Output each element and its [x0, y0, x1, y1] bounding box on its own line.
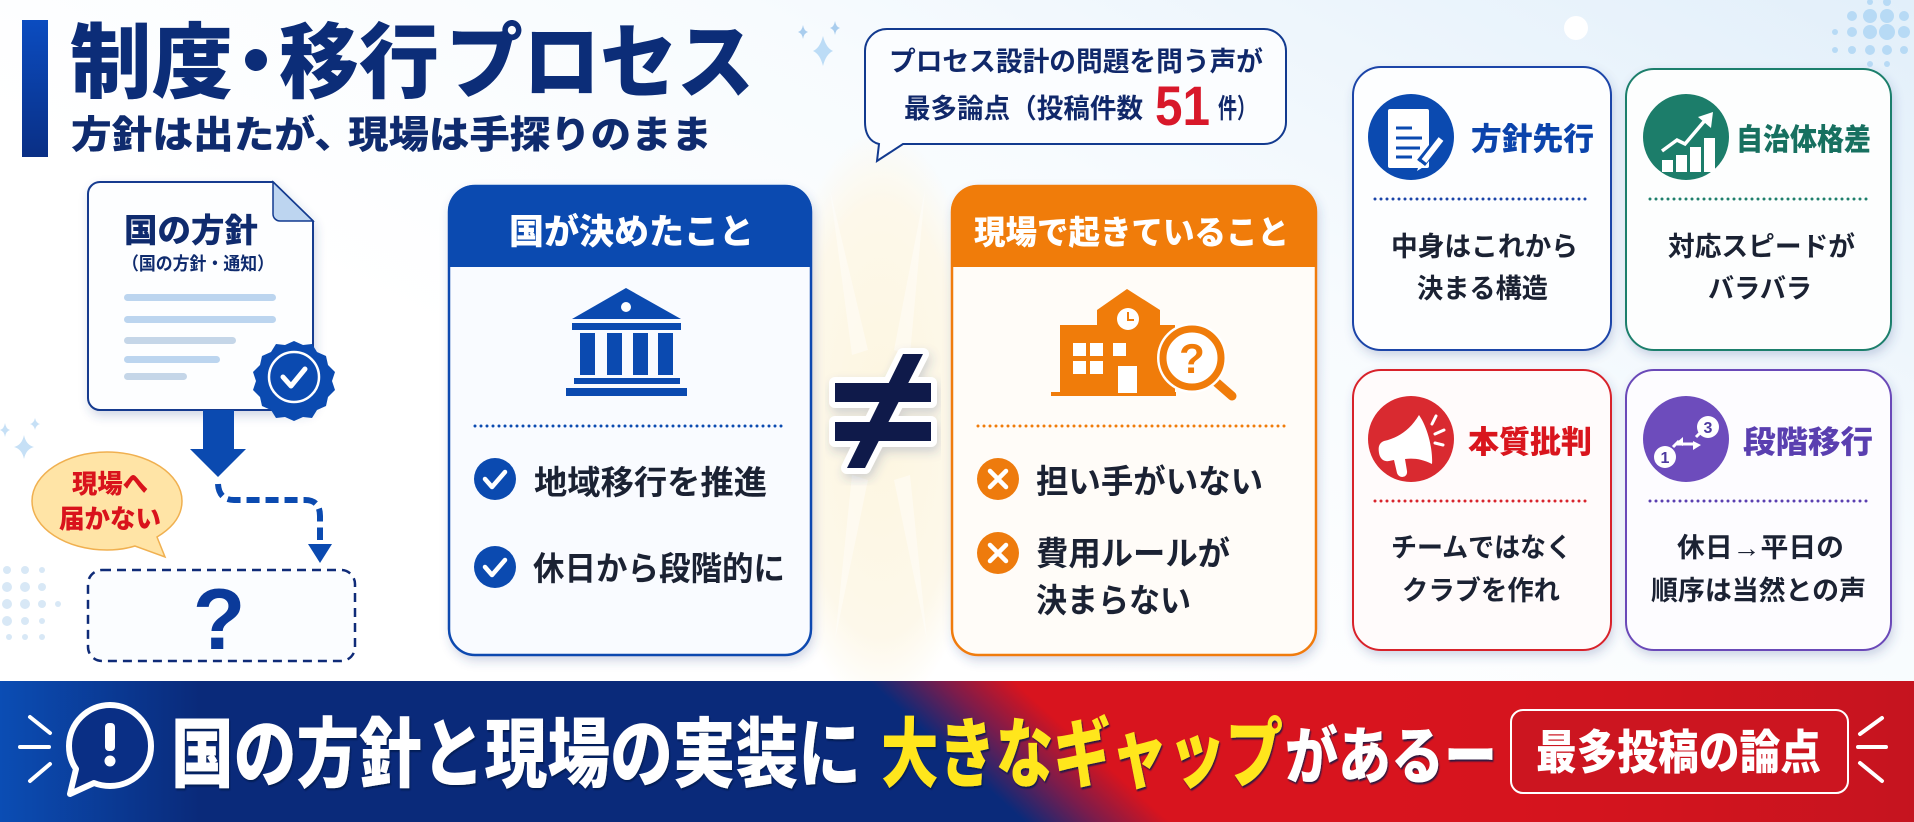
- card: essential criticism: チームではなく: [1391, 533, 1572, 563]
- card: municipal gaps: 自治体格差: [1736, 124, 1871, 157]
- subtitle: 方針は出たが、: [71, 114, 355, 157]
- item: promote regional transition: 地域移行を推進: [534, 464, 767, 501]
- heading: 国が決めたこと: [509, 212, 754, 252]
- unknown box: [88, 570, 355, 668]
- icon: approval seal: [253, 341, 335, 421]
- icon: steps one to three: 1: [1661, 450, 1670, 467]
- card: phased transition: 段階移行: [1743, 425, 1873, 460]
- item: no one to take on: 担い手がいない: [1036, 463, 1263, 500]
- item: cost rules undecided: 決まらない: [1036, 582, 1191, 619]
- icon: school with magnifier: ?: [1179, 335, 1205, 382]
- banner text: 国の方針と現場の実装に: [171, 713, 861, 798]
- icon: policy document: [88, 182, 313, 410]
- icon: rising chart: [1643, 94, 1729, 180]
- panel: policy document flow: [32, 182, 355, 668]
- banner: conclusion: があるー: [1285, 722, 1497, 792]
- icon: policy document: 国の方針: [124, 212, 258, 249]
- card: policy first: 決まる構造: [1417, 274, 1548, 304]
- icon: megaphone: [1368, 396, 1454, 482]
- card: policy first: 方針先行: [1471, 122, 1594, 157]
- number: 51: 51: [1155, 74, 1210, 137]
- panel: what the state decided: [448, 185, 812, 655]
- heading: 現場で起きていること: [974, 214, 1289, 251]
- callout: does not reach the field: 現場へ: [72, 469, 148, 499]
- decoration: sparkles and dots: [0, 0, 1910, 640]
- icon: steps one to three: 3: [1704, 420, 1713, 437]
- callout: does not reach the field: 届かない: [59, 504, 161, 534]
- card: policy first: 中身はこれから: [1391, 232, 1578, 262]
- icon: document and pen: [1368, 94, 1454, 180]
- arrow: down to field: [190, 410, 246, 477]
- subtitle: 現場は手探りのまま: [348, 115, 712, 157]
- card: municipal gaps: 対応スピードが: [1668, 231, 1855, 262]
- card: municipal gaps: [1626, 69, 1891, 350]
- glow behind not-equal sign: [771, 130, 991, 710]
- subtitle: [71, 114, 712, 157]
- icon: policy document: （国の方針・通知）: [122, 253, 274, 274]
- title: 制度: [70, 18, 233, 109]
- icon: steps one to three: [1643, 396, 1729, 482]
- item: stepwise from holidays: [474, 546, 785, 588]
- title: プロセス: [446, 18, 754, 109]
- card: phased transition: 休日→平日の: [1677, 533, 1844, 563]
- not equal sign: [835, 354, 931, 468]
- card: municipal gaps: バラバラ: [1708, 274, 1812, 304]
- icon: speech bubble with exclamation: [69, 705, 151, 794]
- callout: most discussed topic: プロセス設計の問題を問う声が: [889, 46, 1263, 77]
- icon: school with magnifier: [1051, 289, 1232, 396]
- badge: most posted topic: [1511, 710, 1848, 793]
- unknown box: ?: [193, 572, 245, 668]
- banner: conclusion: [0, 681, 1914, 822]
- title: [70, 18, 754, 109]
- card: essential criticism: [1353, 370, 1611, 650]
- title: 移行: [279, 18, 439, 109]
- item: stepwise from holidays: 休日から段階的に: [533, 550, 785, 587]
- item: cost rules undecided: 費用ルールが: [1036, 535, 1230, 572]
- callout: most discussed topic: [865, 29, 1286, 161]
- panel: what is happening in the field: [951, 185, 1317, 655]
- card: phased transition: 順序は当然との声: [1651, 576, 1866, 606]
- banner: conclusion: 大きなギャップ: [881, 713, 1283, 798]
- callout: most discussed topic: 件）: [1218, 94, 1256, 124]
- card: essential criticism: 本質批判: [1468, 425, 1592, 460]
- title block: [22, 18, 754, 157]
- callout: most discussed topic: 最多論点（投稿件数: [904, 94, 1143, 124]
- card: policy first: [1353, 67, 1611, 350]
- arrow: dashed path to unknown: [218, 484, 332, 563]
- item: promote regional transition: [474, 458, 767, 501]
- item: cost rules undecided: [977, 532, 1230, 619]
- card: phased transition: [1626, 370, 1891, 650]
- callout: does not reach the field: [32, 452, 182, 557]
- icon: government building: [566, 288, 687, 396]
- badge: most posted topic: 最多投稿の論点: [1536, 726, 1821, 779]
- card: essential criticism: クラブを作れ: [1402, 575, 1560, 606]
- item: no one to take on: [977, 458, 1263, 500]
